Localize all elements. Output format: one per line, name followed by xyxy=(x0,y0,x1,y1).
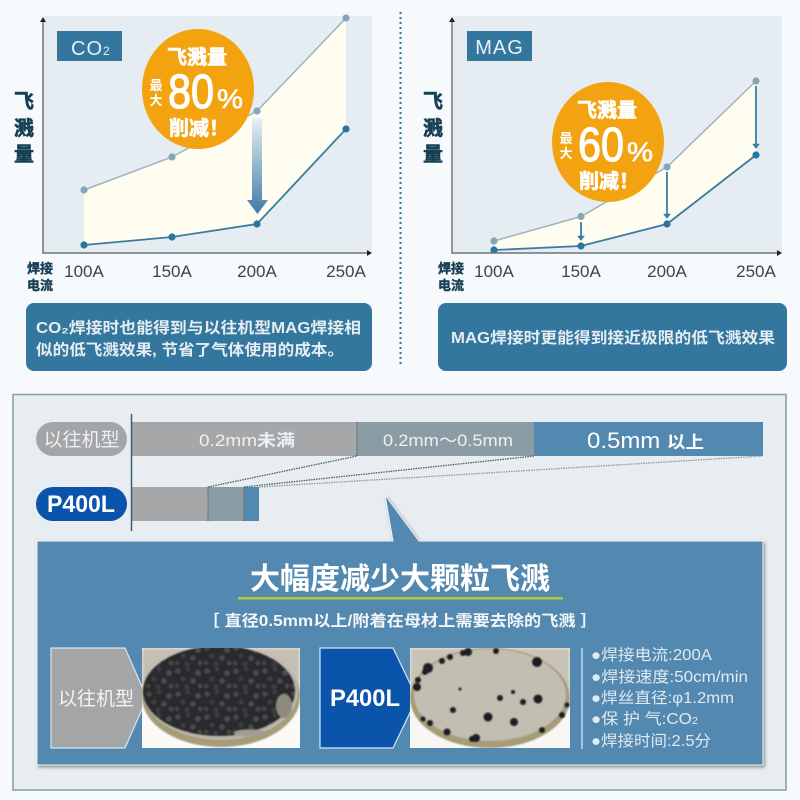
callout: CO2 note xyxy=(26,303,372,371)
axis arrowheads xyxy=(449,17,782,256)
tag: previous model: 以往机型 xyxy=(58,688,134,710)
x axis labels: 250A xyxy=(326,262,367,281)
axis line xyxy=(130,414,132,531)
axes xyxy=(452,22,778,253)
y axis label: 量 xyxy=(14,143,34,166)
P400L line xyxy=(490,151,760,254)
axes xyxy=(43,22,368,253)
previous model line xyxy=(490,77,760,245)
y axis label xyxy=(14,91,34,166)
badge: 60% reduction: 最 xyxy=(559,131,573,146)
photo: P400L spatter xyxy=(410,648,570,748)
bar: previous model: 0.2mm 未满 xyxy=(199,431,295,450)
badge: 60% reduction xyxy=(552,82,664,202)
badge: 80% reduction: % xyxy=(217,84,243,114)
label: P400L: P400L xyxy=(47,491,115,518)
badge: 60% reduction: 60 xyxy=(578,119,624,172)
panel: callout result xyxy=(37,495,763,765)
bar: previous model: 0.2mm～0.5mm xyxy=(383,432,513,450)
welding conditions list: ●焊接速度:50cm/min xyxy=(591,668,748,686)
x axis labels: 250A xyxy=(736,262,777,281)
arrows: reduction xyxy=(578,86,760,240)
x axis labels xyxy=(474,262,777,281)
panel: MAG chart xyxy=(423,16,782,293)
y axis label: 飞 xyxy=(423,91,443,113)
label: previous model: 以往机型 xyxy=(43,429,120,451)
divider xyxy=(400,12,402,366)
P400L line xyxy=(80,125,350,249)
badge: 60% reduction: 大 xyxy=(559,146,573,161)
tag: P400L: P400L xyxy=(330,685,400,712)
x axis labels: 100A xyxy=(474,262,515,281)
x axis labels xyxy=(64,262,367,281)
panel: CO2 chart xyxy=(14,14,372,293)
x axis unit label: 电流 xyxy=(27,278,53,293)
CO2 tag xyxy=(57,31,122,61)
callout: CO2 note: 似的低飞溅效果, 节省了气体使用的成本。 xyxy=(36,340,344,359)
x axis labels: 150A xyxy=(561,262,602,281)
tag: P400L xyxy=(320,648,417,748)
y axis label: 溅 xyxy=(423,117,443,140)
badge: 80% reduction xyxy=(142,29,254,149)
y axis label xyxy=(423,91,443,166)
MAG tag: MAG xyxy=(475,37,524,59)
connector lines xyxy=(208,422,763,521)
welding conditions list: ●焊接时间:2.5分 xyxy=(591,732,711,750)
tag: previous model xyxy=(51,648,147,748)
welding conditions list: ●保 护 气:CO 2 xyxy=(591,710,698,728)
reduction area xyxy=(84,18,346,245)
heading: 大幅度减少大颗粒飞溅 xyxy=(250,563,550,596)
x axis unit label xyxy=(27,261,53,293)
welding conditions list xyxy=(591,646,748,750)
y axis label: 量 xyxy=(423,143,443,166)
x axis unit label: 焊接 xyxy=(438,261,464,276)
bar: P400L xyxy=(132,487,259,521)
welding conditions list: ●焊接电流:200A xyxy=(591,646,713,664)
heading underline xyxy=(238,597,563,600)
x axis unit label: 焊接 xyxy=(27,261,53,276)
reduction area xyxy=(494,81,756,250)
badge: 60% reduction: % xyxy=(627,137,653,167)
callout: CO2 note: CO₂焊接时也能得到与以往机型MAG焊接相 xyxy=(36,318,361,337)
x axis labels: 200A xyxy=(647,262,688,281)
CO2 tag: CO2 xyxy=(71,38,111,60)
bar: previous model xyxy=(132,422,763,456)
welding conditions list: ●焊丝直径:φ1.2mm xyxy=(591,689,734,707)
photo: previous model spatter xyxy=(142,646,300,748)
badge: 60% reduction: 飞溅量 xyxy=(577,99,637,122)
x axis labels: 200A xyxy=(237,262,278,281)
x axis unit label xyxy=(438,261,464,293)
callout: MAG note: MAG焊接时更能得到接近极限的低飞溅效果 xyxy=(451,328,776,347)
callout: MAG note xyxy=(438,303,787,371)
badge: 80% reduction: 大 xyxy=(149,93,163,108)
y axis label: 溅 xyxy=(14,117,34,140)
badge: 80% reduction: 80 xyxy=(168,66,214,119)
badge: 60% reduction: 削减！ xyxy=(579,170,639,193)
arrow: reduction xyxy=(247,118,268,214)
badge: 80% reduction: 削减！ xyxy=(169,117,229,140)
bar: previous model: 0.5mm 以上 xyxy=(587,428,704,453)
label: previous model xyxy=(36,422,127,456)
x axis labels: 150A xyxy=(152,262,193,281)
y axis label: 飞 xyxy=(14,91,34,113)
previous model line xyxy=(80,14,350,194)
x axis unit label: 电流 xyxy=(438,278,464,293)
badge: 80% reduction: 最 xyxy=(149,78,163,93)
MAG tag xyxy=(467,31,532,61)
label: P400L xyxy=(36,487,127,521)
badge: 80% reduction: 飞溅量 xyxy=(167,46,227,69)
panel: spatter size comparison xyxy=(13,394,786,790)
subheading: ［ 直径0.5mm以上/附着在母材上需要去除的飞溅 ］ xyxy=(202,611,598,630)
x axis labels: 100A xyxy=(64,262,105,281)
axis arrowheads xyxy=(40,17,372,256)
divider line xyxy=(581,648,583,749)
